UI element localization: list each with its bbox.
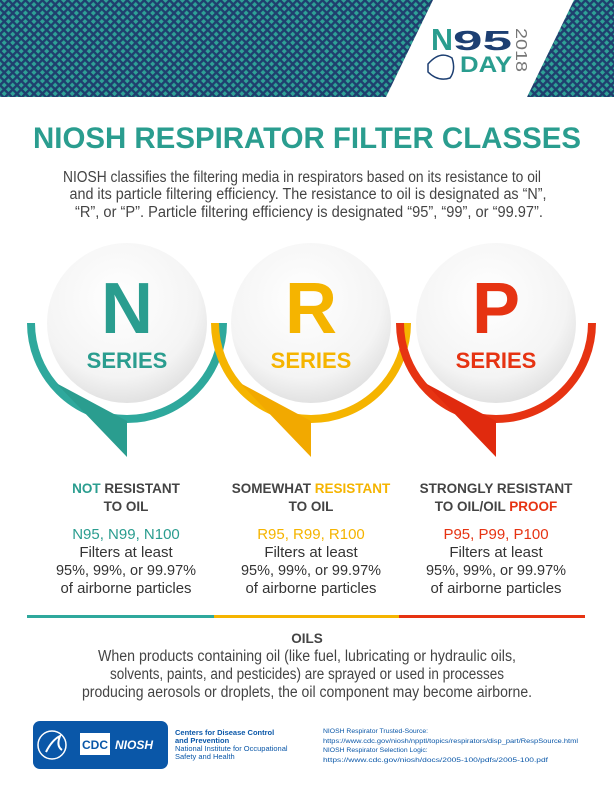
text block: R series description: SOMEWHAT RESISTANT <box>232 481 391 496</box>
intro text: NIOSH classifies the filtering media in respirators based on its resistance to oil <box>63 169 541 186</box>
panel: N series badge: SERIES <box>87 348 167 373</box>
logo: N95 Day 2018: 2018 <box>512 28 529 72</box>
logo: HHS CDC NIOSH: NIOSH <box>115 738 153 752</box>
text block: R series description: TO OIL <box>289 499 333 514</box>
intro text <box>63 169 546 221</box>
logo: HHS CDC NIOSH <box>33 721 168 769</box>
text block: R series description: Filters at least <box>264 544 359 561</box>
text block: N series description: of airborne particles <box>60 580 192 597</box>
panel: R series badge <box>215 243 407 457</box>
text block: sources: https://www.cdc.gov/niosh/docs/2005-100/pdfs/2005-100.pdf <box>323 757 548 764</box>
text block: oils <box>82 631 532 701</box>
logo: N95 Day 2018 <box>428 22 529 79</box>
text block: oils: producing aerosols or droplets, the oil component may become airborne. <box>82 684 532 701</box>
panel: P series badge: SERIES <box>456 348 536 373</box>
text block: R series description: 95%, 99%, or 99.97% <box>241 562 381 579</box>
panel: N series badge <box>31 243 223 457</box>
logo: N95 Day 2018: 95 <box>453 25 512 56</box>
text block: N series description: TO OIL <box>104 499 148 514</box>
text block: P series description: of airborne particles <box>430 580 562 597</box>
header pattern band <box>0 0 614 97</box>
text block: P series description: Filters at least <box>449 544 544 561</box>
text block: P series description: P95, P99, P100 <box>443 526 549 543</box>
panel: P series badge <box>400 243 592 457</box>
text block: R series description <box>232 481 391 597</box>
logo: N95 Day 2018: DAY <box>460 52 512 77</box>
panel: P series badge: P <box>472 269 520 349</box>
text block: oils: When products containing oil (like fuel, lubricating or hydraulic oils, <box>98 648 516 665</box>
text block: sources: https://www.cdc.gov/niosh/npptl/topics/respirators/disp_part/RespSource.html <box>323 738 579 745</box>
text block: R series description: of airborne particles <box>246 580 376 597</box>
text block: P series description: STRONGLY RESISTANT <box>420 481 573 496</box>
text block: N series description: Filters at least <box>79 544 174 561</box>
title: NIOSH RESPIRATOR FILTER CLASSES <box>33 122 581 155</box>
text block: agency names: National Institute for Occupational <box>175 744 288 753</box>
text block: sources <box>323 728 579 764</box>
text block: N series description: 95%, 99%, or 99.97% <box>56 562 196 579</box>
panel: R series badge: R <box>285 269 337 349</box>
text block: sources: NIOSH Respirator Selection Logic: <box>323 747 428 754</box>
text block: N series description: N95, N99, N100 <box>72 526 180 543</box>
text block: agency names: Safety and Health <box>175 752 235 761</box>
text block: oils: OILS <box>291 631 323 646</box>
text block: agency names: and Prevention <box>175 736 230 745</box>
text block: P series description <box>420 481 573 597</box>
panel: R series badge: SERIES <box>271 348 351 373</box>
text block: P series description: TO OIL/OIL PROOF <box>435 499 557 514</box>
panel: N series badge: N <box>101 269 153 349</box>
intro text: “R”, or “P”. Particle filtering efficiency is designated “95”, “99”, or “99.97”. <box>75 204 543 221</box>
text block: R series description: R95, R99, R100 <box>257 526 365 543</box>
text block: agency names <box>175 728 288 761</box>
icon: mask <box>428 55 454 79</box>
text block: agency names: Centers for Disease Control <box>175 728 274 737</box>
logo: N95 Day 2018: N <box>431 22 453 57</box>
logo: HHS CDC NIOSH: CDC <box>82 738 108 752</box>
text block: N series description <box>56 481 196 597</box>
text block: oils: solvents, paints, and pesticides) are sprayed or used in processes <box>110 666 504 683</box>
text block: N series description: NOT RESISTANT <box>72 481 181 496</box>
text block: P series description: 95%, 99%, or 99.97% <box>426 562 566 579</box>
intro text: and its particle filtering efficiency. The resistance to oil is designated as “N”, <box>70 186 546 203</box>
text block: sources: NIOSH Respirator Trusted-Source: <box>323 728 428 735</box>
